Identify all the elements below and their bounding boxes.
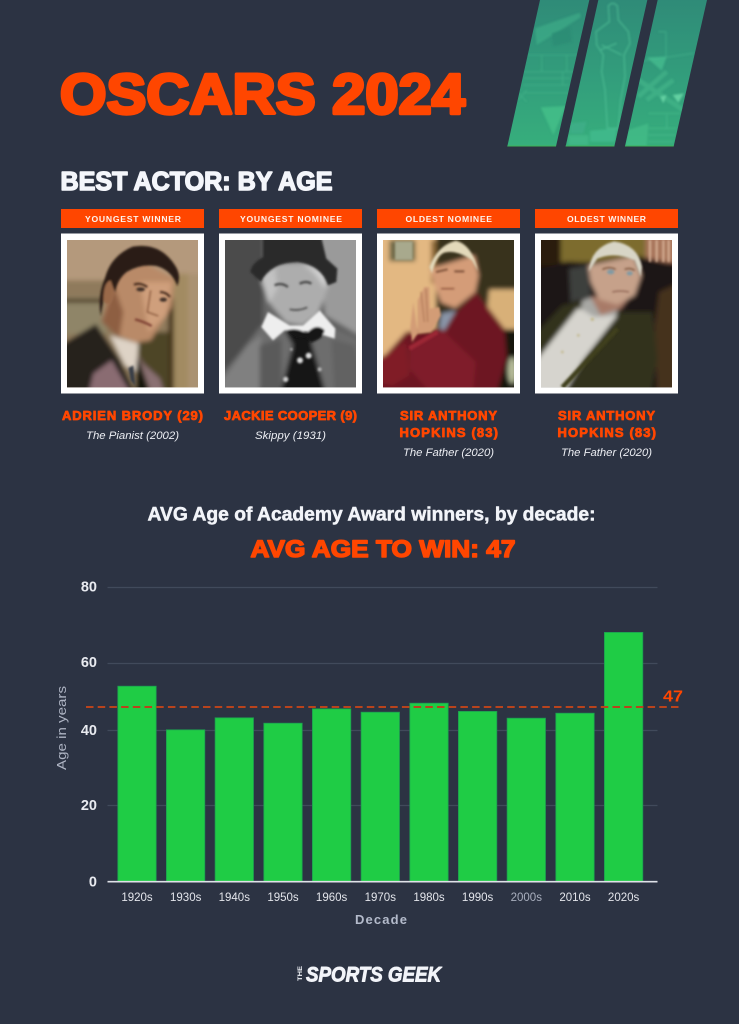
badge: oldest nominee: OLDEST NOMINEE (406, 214, 492, 224)
title: OSCARS 2024 (60, 62, 466, 126)
panel: youngest nominee (218, 209, 365, 442)
name: Adrien Brody: ADRIEN BRODY (29) (62, 408, 203, 423)
x axis labels: 2000s (511, 892, 542, 904)
y axis labels: 0 (89, 874, 97, 890)
film: Skippy: Skippy (1931) (255, 430, 326, 442)
badge: oldest winner (535, 209, 678, 228)
x axis labels: 1950s (267, 892, 299, 904)
x axis labels: 1990s (462, 892, 494, 904)
badge: youngest nominee: YOUNGEST NOMINEE (240, 214, 342, 224)
name: Sir Anthony Hopkins, nominee: SIR ANTHONY (400, 408, 497, 423)
bars (118, 632, 643, 882)
panel: youngest winner (60, 209, 208, 442)
chart subheading: average age to win: AVG AGE TO WIN: 47 (250, 536, 516, 563)
photo frame: Adrien Brody (60, 232, 208, 395)
badge: oldest winner: OLDEST WINNER (567, 214, 647, 224)
photo frame: Jackie Cooper (218, 232, 365, 395)
x axis labels: 1980s (413, 892, 445, 904)
x axis labels: 1930s (170, 892, 202, 904)
x axis labels: 1960s (316, 892, 348, 904)
y axis labels (81, 580, 97, 890)
logo: The Sports Geek: SPORTS GEEK (306, 964, 443, 986)
decorative film stripes (507, 0, 707, 146)
y axis title: Age in years (55, 686, 69, 770)
panel: oldest winner (534, 209, 681, 459)
badge: youngest winner (61, 209, 204, 228)
chart heading: AVG Age of Academy Award winners, by decade: (148, 504, 596, 526)
section heading: best actor by age: BEST ACTOR: BY AGE (60, 166, 332, 196)
y axis labels: 80 (81, 580, 97, 596)
badge: oldest nominee (377, 209, 520, 228)
name: Sir Anthony Hopkins, nominee: HOPKINS (83) (400, 425, 498, 440)
x axis labels (121, 892, 640, 904)
x axis labels: 1920s (121, 892, 153, 904)
logo: The Sports Geek: THE (298, 966, 304, 981)
average value label: 47 (663, 688, 683, 706)
x axis labels: 2010s (559, 892, 591, 904)
name: Sir Anthony Hopkins, winner: HOPKINS (83) (558, 425, 656, 440)
film: The Pianist: The Pianist (2002) (86, 430, 179, 442)
bar chart: age by decade (55, 580, 683, 927)
x axis labels: 2020s (608, 892, 640, 904)
photo frame: Anthony Hopkins, armchair (534, 232, 681, 395)
x axis line (108, 881, 658, 883)
y axis labels: 40 (81, 723, 97, 739)
film: The Father: The Father (2020) (561, 447, 652, 459)
badge: youngest nominee (219, 209, 362, 228)
panel: oldest nominee (376, 209, 523, 459)
name: Sir Anthony Hopkins, winner: SIR ANTHONY (558, 408, 655, 423)
y axis labels: 60 (81, 655, 97, 671)
x axis title: Decade (355, 912, 407, 927)
name: Sir Anthony Hopkins, nominee (400, 408, 498, 440)
y axis labels: 20 (81, 798, 97, 814)
average reference line (86, 706, 681, 708)
badge: youngest winner: YOUNGEST WINNER (85, 214, 182, 224)
name: Jackie Cooper: JACKIE COOPER (9) (224, 408, 357, 423)
x axis labels: 1940s (219, 892, 250, 904)
photo frame: Anthony Hopkins, red robe (376, 232, 523, 395)
film: The Father: The Father (2020) (403, 447, 494, 459)
x axis labels: 1970s (365, 892, 396, 904)
name: Sir Anthony Hopkins, winner (558, 408, 656, 440)
